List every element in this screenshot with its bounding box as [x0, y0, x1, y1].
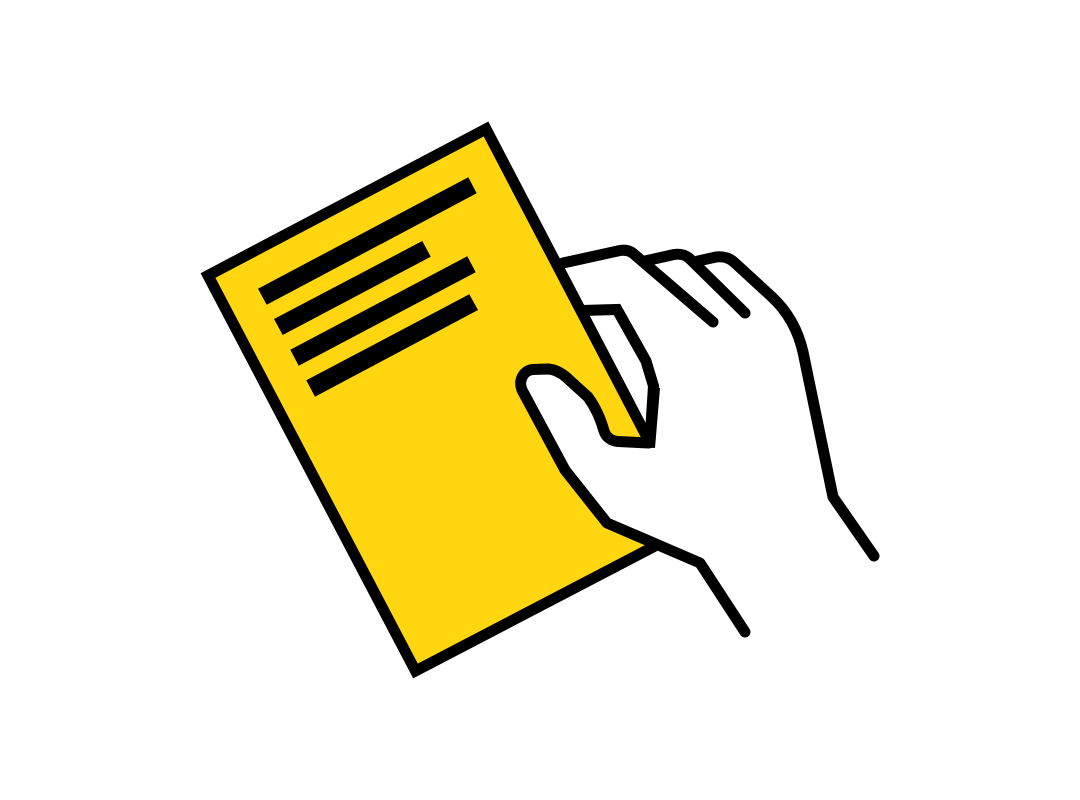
index finger	[563, 250, 713, 322]
ring finger and back of hand	[698, 257, 874, 556]
yellow document sheet	[208, 129, 655, 671]
middle finger	[645, 254, 745, 313]
text lines on document	[258, 177, 478, 397]
little finger tip wedge	[640, 385, 660, 448]
little finger behind document	[582, 310, 654, 440]
hand: thumb and palm edge	[521, 369, 745, 632]
hand: fingers	[563, 250, 874, 556]
